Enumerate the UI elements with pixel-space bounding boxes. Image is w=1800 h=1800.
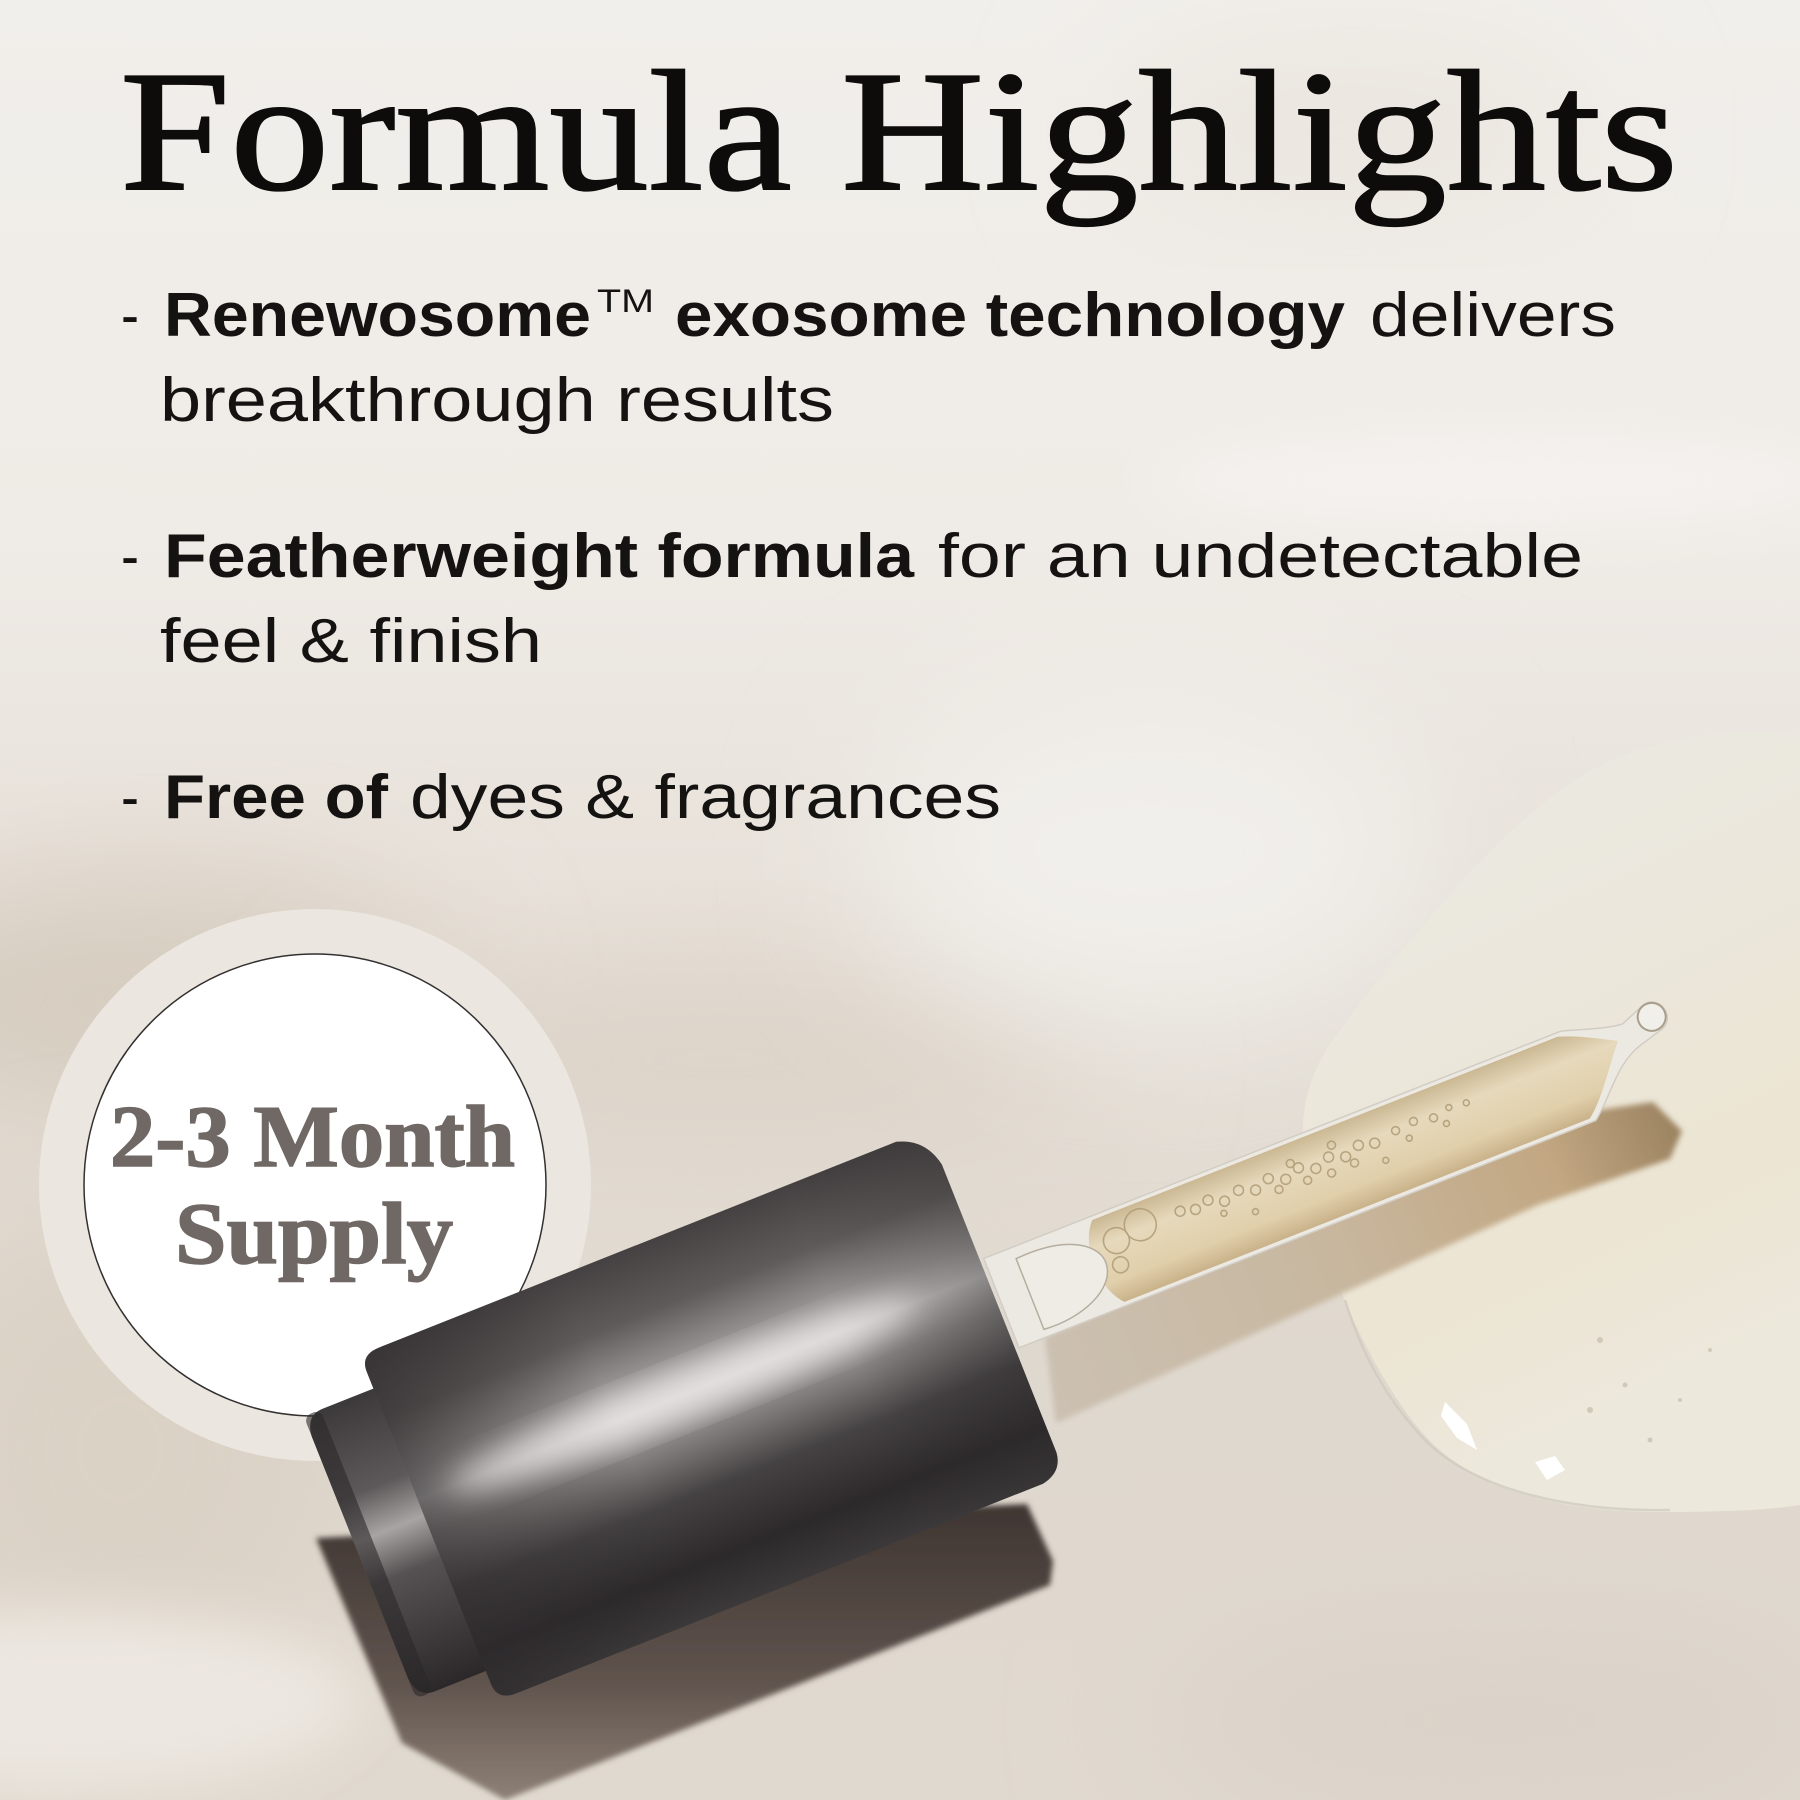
badge: 2-3 month supply: Supply — [175, 1186, 453, 1283]
bullet: featherweight formula: - — [121, 522, 139, 591]
badge: 2-3 month supply: 2-3 Month — [110, 1089, 515, 1186]
bullet: Renewosome technology — [121, 281, 1616, 435]
bullet: Renewosome technology: Renewosome — [164, 281, 591, 350]
bullet: featherweight formula: Featherweight formula — [164, 522, 915, 591]
bullet: Renewosome technology: exosome technology — [675, 281, 1346, 350]
bullet: Renewosome technology: - — [121, 281, 139, 350]
bullet: featherweight formula: for an undetectable — [938, 522, 1583, 591]
glass dropper — [984, 993, 1694, 1348]
glass bulb highlight — [1016, 1228, 1121, 1330]
shadow of dropper cap — [316, 1504, 1053, 1800]
oil droplet pool — [1303, 732, 1800, 1512]
shadow of dropper tube — [1045, 1102, 1682, 1423]
bullet: free of dyes and fragrances — [121, 763, 1001, 832]
bullet: free of dyes and fragrances: - — [121, 763, 139, 832]
cap highlight — [441, 1280, 924, 1509]
bullet: Renewosome technology: delivers — [1370, 281, 1616, 350]
title: Formula Highlights — [120, 37, 1678, 227]
badge: 2-3 month supply — [39, 909, 591, 1461]
bullet: featherweight formula: feel & finish — [160, 607, 542, 676]
cap end shading — [360, 1129, 1065, 1701]
bullet: Renewosome technology: TM — [597, 283, 654, 319]
bubbles — [1096, 1081, 1481, 1275]
bullet: free of dyes and fragrances: Free of — [164, 763, 388, 832]
glass tube — [984, 993, 1694, 1348]
dropper cap — [290, 1129, 1065, 1728]
liquid fill — [1078, 1017, 1641, 1307]
cap body — [360, 1129, 1065, 1701]
bullet: featherweight formula — [121, 522, 1583, 676]
bullet: Renewosome technology: breakthrough results — [160, 366, 834, 435]
bullet: free of dyes and fragrances: dyes & fragrances — [410, 763, 1001, 832]
tip highlight — [1634, 999, 1670, 1035]
cap knob — [304, 1387, 490, 1699]
cap face shading — [304, 1410, 433, 1699]
